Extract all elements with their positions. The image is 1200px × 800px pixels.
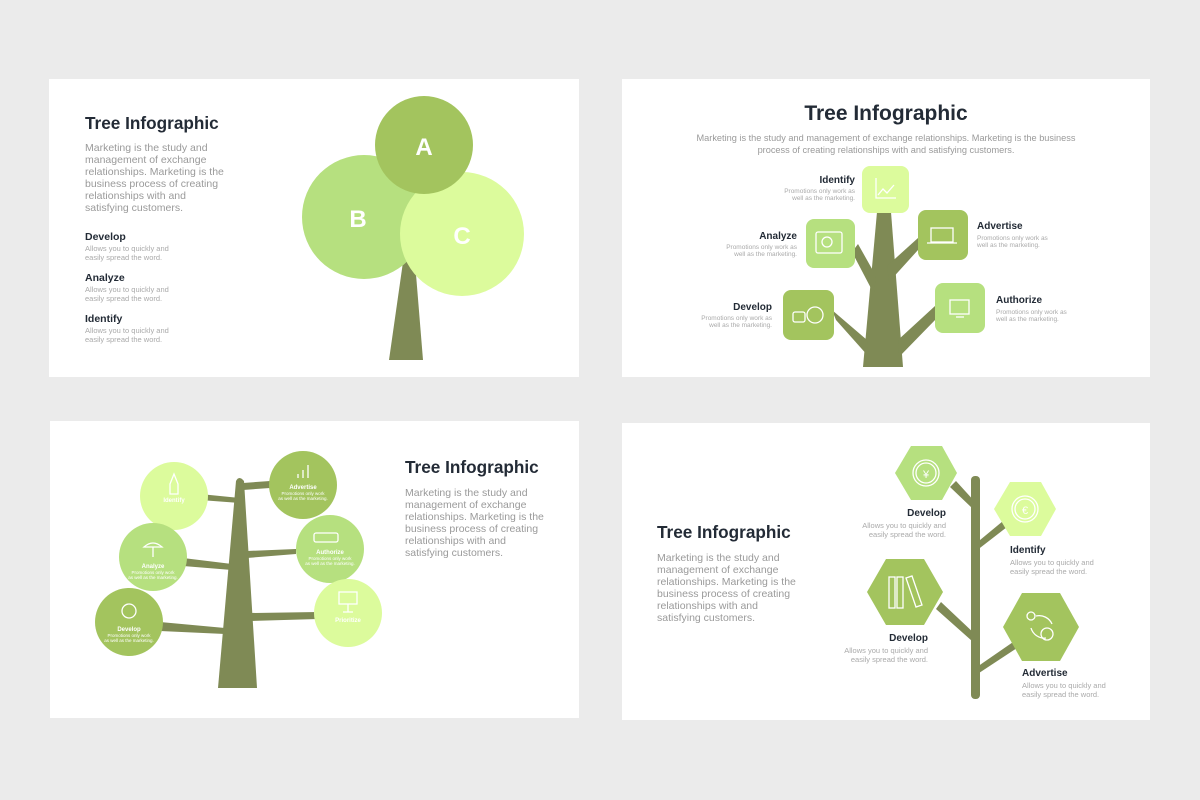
- hexagon: Develop top: [862, 446, 957, 539]
- hexagon: Advertise: [1003, 593, 1106, 699]
- hexagon: Identify: €: [1022, 505, 1028, 517]
- hexagon: Develop bottom: Develop: [889, 633, 928, 644]
- list items: Develop: [85, 231, 126, 243]
- list items: Allows you to quickly and: [85, 326, 169, 335]
- hexagon: Develop top: easily spread the word.: [869, 530, 946, 539]
- node: Authorize: Promotions only work: [308, 556, 352, 561]
- hexagon: Advertise: Allows you to quickly and: [1022, 681, 1106, 690]
- title: Tree Infographic: [657, 522, 791, 542]
- node: Develop: Promotions only work: [107, 633, 151, 638]
- circle A: [375, 96, 473, 194]
- node: Identify: [140, 462, 208, 530]
- box: Analyze: well as the marketing.: [733, 251, 797, 258]
- node: Develop: as well as the marketing.: [104, 638, 154, 643]
- list items: Identify: [85, 313, 122, 325]
- node: Develop: Develop: [117, 627, 141, 633]
- description: satisfying customers.: [405, 547, 503, 559]
- node: Analyze: [119, 523, 187, 591]
- panel: hexagon tree: [622, 423, 1150, 720]
- description: relationships. Marketing is the: [657, 576, 796, 588]
- circle B: [302, 155, 426, 279]
- hexagon: Identify: Allows you to quickly and: [1010, 558, 1094, 567]
- description: [697, 133, 1076, 155]
- box: Analyze: Analyze: [759, 231, 797, 242]
- box: Identify: Promotions only work as: [784, 188, 856, 195]
- description: business process of creating: [657, 588, 790, 600]
- box: Analyze: [726, 219, 855, 268]
- box: Develop: Promotions only work as: [701, 315, 773, 322]
- hexagon: Develop top: ¥: [922, 469, 930, 481]
- description text: Marketing is the study and: [85, 142, 208, 154]
- node: Prioritize: [314, 579, 382, 647]
- node: Authorize: [296, 515, 364, 583]
- box: Authorize: Promotions only work as: [996, 309, 1068, 316]
- box: Advertise: Advertise: [977, 221, 1023, 232]
- description text: business process of creating: [85, 178, 218, 190]
- description: [405, 487, 544, 559]
- description: [657, 552, 796, 624]
- hexagon: Develop bottom: easily spread the word.: [851, 655, 928, 664]
- node: Authorize: Authorize: [316, 550, 344, 556]
- node: Develop: [95, 588, 163, 656]
- trunk: [389, 262, 423, 360]
- panel: circles tree: [49, 79, 579, 377]
- title: Tree Infographic: [804, 102, 968, 125]
- list items: easily spread the word.: [85, 294, 162, 303]
- description: business process of creating: [405, 523, 538, 535]
- box: Authorize: [935, 283, 1068, 333]
- hexagon: Develop top: Develop: [907, 508, 946, 519]
- panel: round nodes tree: [50, 421, 579, 718]
- list items: easily spread the word.: [85, 253, 162, 262]
- node: Analyze: Promotions only work: [131, 570, 175, 575]
- node: Identify: Identify: [163, 498, 185, 504]
- box: Identify: well as the marketing.: [791, 195, 855, 202]
- description: Marketing is the study and: [405, 487, 528, 499]
- circle B: B: [349, 206, 367, 233]
- list items: [85, 231, 169, 344]
- description text: [85, 142, 224, 214]
- box: Advertise: well as the marketing.: [976, 242, 1040, 249]
- node: Analyze: as well as the marketing.: [128, 575, 178, 580]
- box: Develop: Develop: [733, 302, 772, 313]
- description: satisfying customers.: [657, 612, 755, 624]
- node: Analyze: Analyze: [142, 564, 165, 570]
- trunk and branches: [160, 478, 318, 688]
- description: relationships with and: [405, 535, 506, 547]
- box: Analyze: Promotions only work as: [726, 244, 798, 251]
- description text: satisfying customers.: [85, 202, 183, 214]
- hexagon: Develop bottom: Allows you to quickly and: [844, 646, 928, 655]
- trunk and branches: [936, 476, 1020, 699]
- hexagon: Develop top: Allows you to quickly and: [862, 521, 946, 530]
- circle A: A: [415, 134, 433, 161]
- description: Marketing is the study and management of exchange relationships. Marketing is the business: [697, 133, 1076, 143]
- box: Advertise: Promotions only work as: [977, 235, 1049, 242]
- title: Tree Infographic: [85, 113, 219, 133]
- box: Develop: well as the marketing.: [708, 322, 772, 329]
- description text: relationships with and: [85, 190, 186, 202]
- description: management of exchange: [405, 499, 527, 511]
- box: Authorize: well as the marketing.: [995, 316, 1059, 323]
- hexagon: Identify: Identify: [1010, 545, 1046, 556]
- circle C: [400, 172, 524, 296]
- description text: relationships. Marketing is the: [85, 166, 224, 178]
- hexagon: Develop bottom: [844, 559, 943, 664]
- box: Identify: [784, 166, 909, 213]
- hexagon: Advertise: easily spread the word.: [1022, 690, 1099, 699]
- trunk and branches: [832, 212, 937, 367]
- node: Advertise: Promotions only work: [281, 491, 325, 496]
- box: Authorize: Authorize: [996, 295, 1043, 306]
- node: Advertise: as well as the marketing.: [278, 496, 328, 501]
- panel: square boxes tree: [622, 79, 1150, 377]
- list items: Analyze: [85, 272, 125, 284]
- list items: easily spread the word.: [85, 335, 162, 344]
- description: relationships with and: [657, 600, 758, 612]
- description: Marketing is the study and: [657, 552, 780, 564]
- description: process of creating relationships with and satisfying customers.: [758, 145, 1014, 155]
- node: Authorize: as well as the marketing.: [305, 561, 355, 566]
- list items: Allows you to quickly and: [85, 244, 169, 253]
- hexagon: Identify: [994, 482, 1094, 576]
- circle C: C: [453, 223, 471, 250]
- description text: management of exchange: [85, 154, 207, 166]
- node: Advertise: [269, 451, 337, 519]
- title: Tree Infographic: [405, 457, 539, 477]
- box: Advertise: [918, 210, 1049, 260]
- node: Prioritize: Prioritize: [335, 618, 361, 624]
- description: relationships. Marketing is the: [405, 511, 544, 523]
- node: Advertise: Advertise: [289, 485, 317, 491]
- box: Develop: [701, 290, 834, 340]
- box: Identify: Identify: [819, 175, 855, 186]
- description: management of exchange: [657, 564, 779, 576]
- list items: Allows you to quickly and: [85, 285, 169, 294]
- hexagon: Advertise: Advertise: [1022, 668, 1068, 679]
- hexagon: Identify: easily spread the word.: [1010, 567, 1087, 576]
